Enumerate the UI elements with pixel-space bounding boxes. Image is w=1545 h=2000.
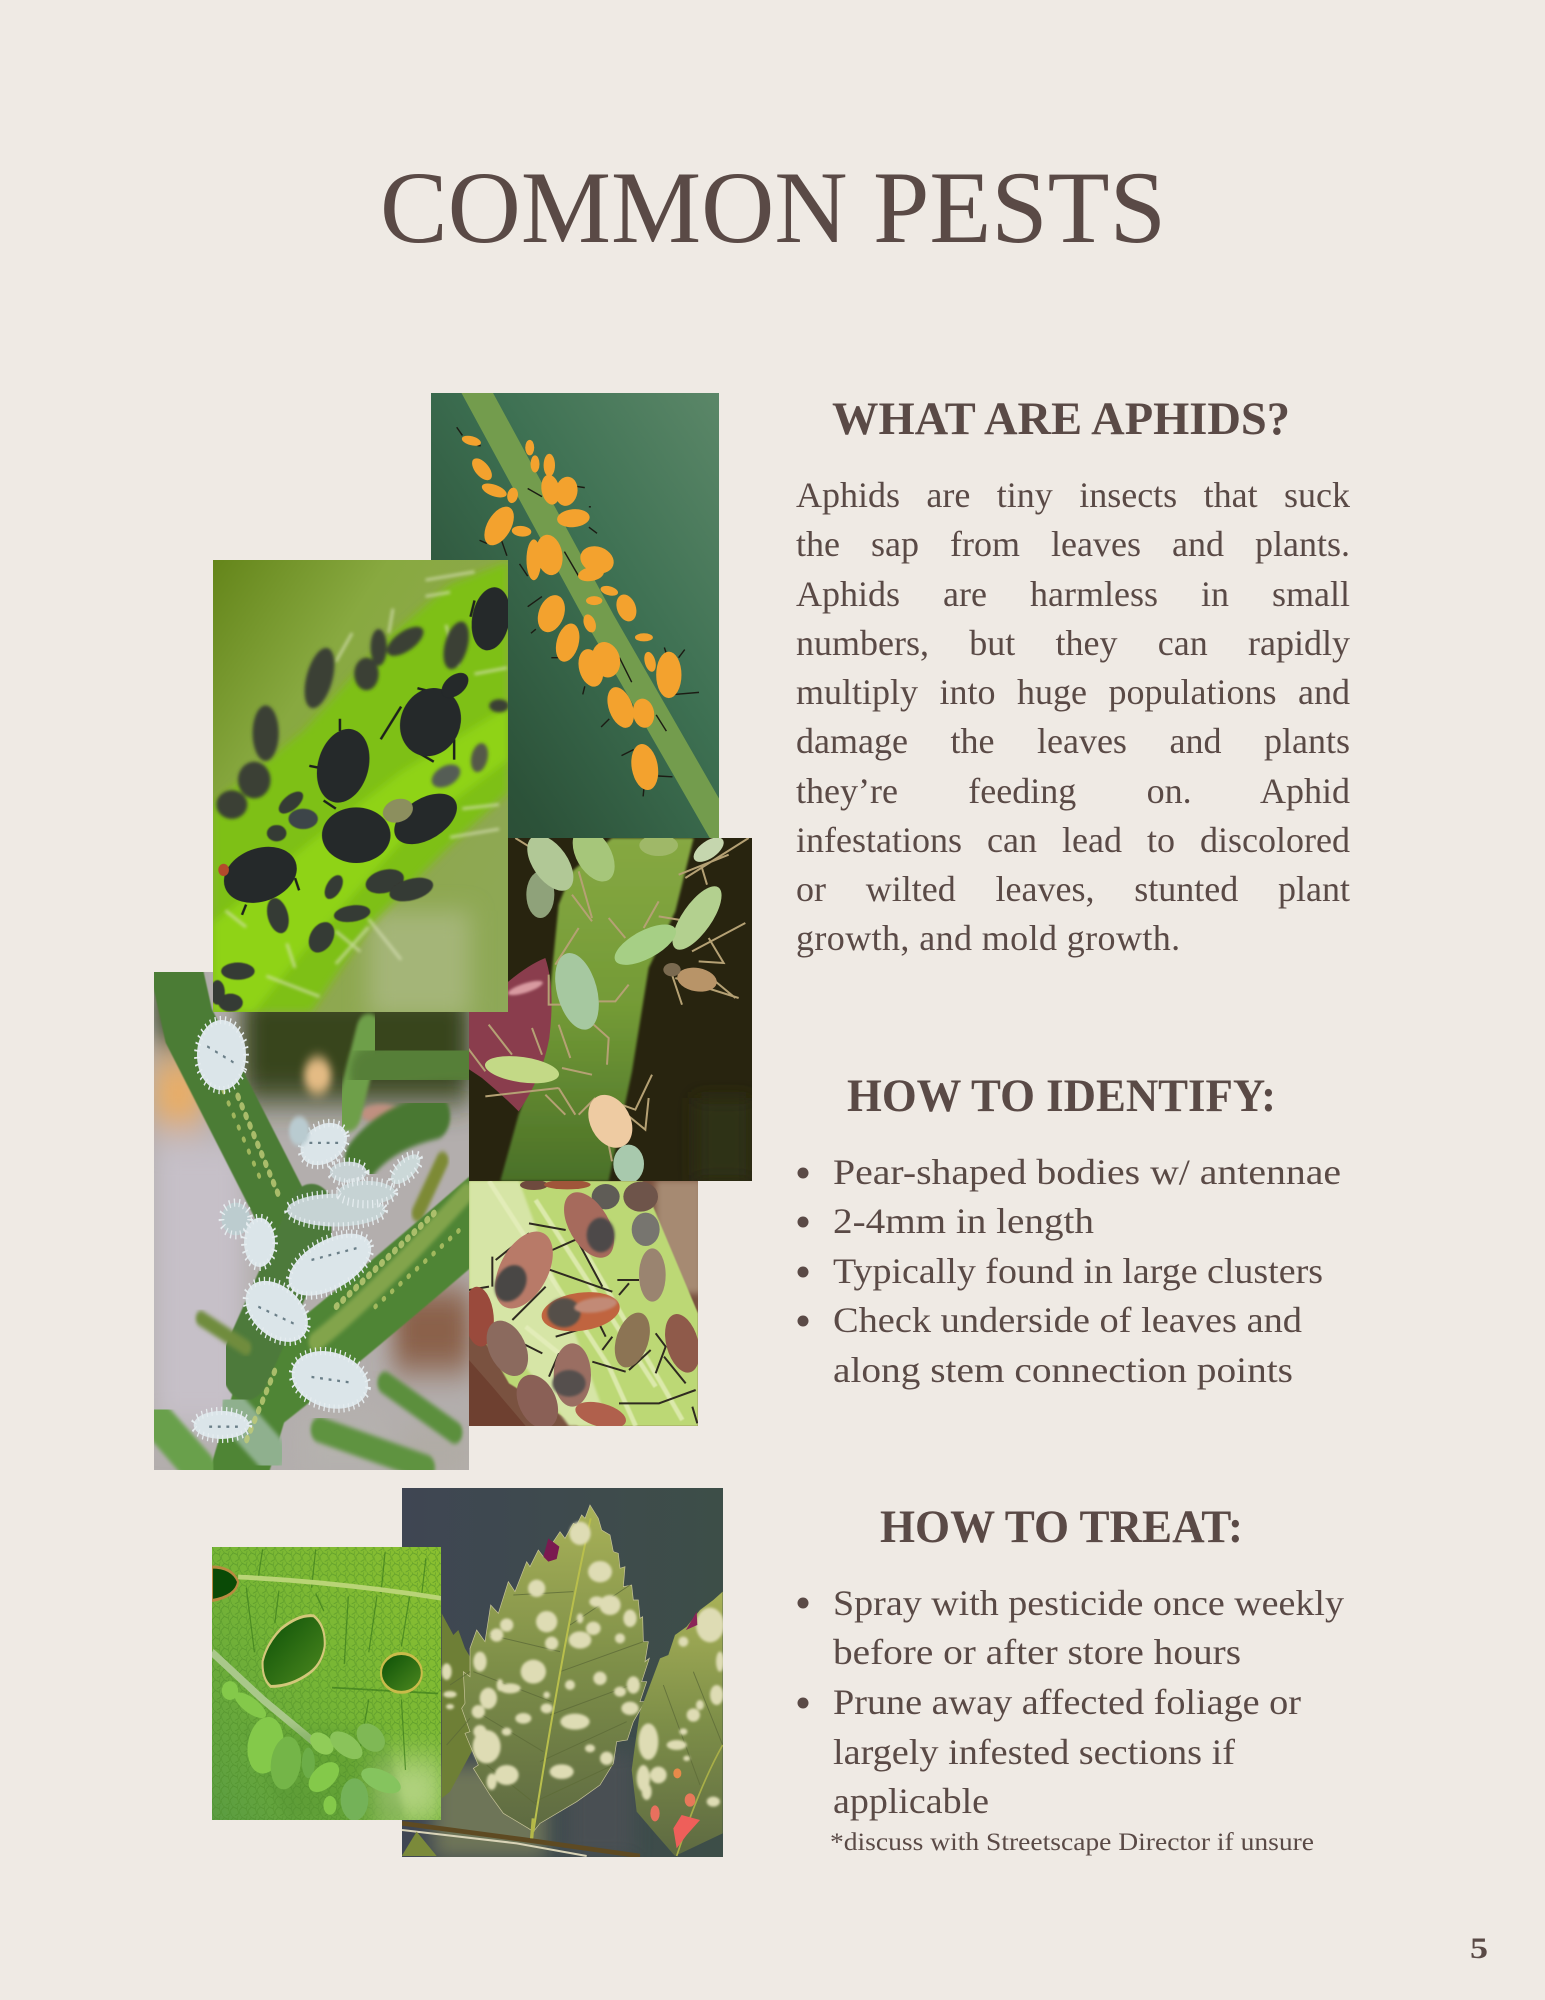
photo: woolly white pests on green stems xyxy=(154,972,469,1470)
list: how to treat bullets: Prune away affected foliage or xyxy=(833,1682,1301,1722)
heading: how to identify: HOW TO IDENTIFY: xyxy=(847,1070,1276,1122)
page number: 5 xyxy=(1470,1932,1488,1965)
list: how to identify bullets: Typically found in large clusters xyxy=(833,1251,1323,1291)
list: how to treat bullets: before or after store hours xyxy=(833,1632,1241,1672)
list: how to identify bullets: 2-4mm in length xyxy=(833,1201,1094,1241)
photo: black aphids on bright green leaf xyxy=(213,560,508,1012)
photo: green aphids on leaf with holes xyxy=(212,1547,441,1820)
paragraph: aphids description: Aphids are harmless in small xyxy=(796,574,1350,614)
paragraph: aphids description xyxy=(796,475,1350,958)
photo: pale green aphids on stem xyxy=(469,838,752,1181)
list: how to identify bullets: Check underside of leaves and xyxy=(833,1300,1302,1340)
list: how to treat bullets xyxy=(798,1583,1344,1821)
list: how to identify bullets: along stem connection points xyxy=(833,1350,1293,1390)
list: how to identify bullets: Pear-shaped bodies w/ antennae xyxy=(833,1152,1341,1192)
footnote: *discuss with Streetscape Director if unsure xyxy=(830,1829,1314,1856)
photo: rose leaves with white stippling xyxy=(402,1488,723,1857)
paragraph: aphids description: or wilted leaves, stunted plant xyxy=(796,869,1350,909)
list: how to treat bullets: applicable xyxy=(833,1781,989,1821)
photo: orange aphids on green stem xyxy=(431,393,719,838)
paragraph: aphids description: multiply into huge populations and xyxy=(796,672,1350,712)
list: how to treat bullets: largely infested sections if xyxy=(833,1732,1235,1772)
paragraph: aphids description: growth, and mold growth. xyxy=(796,918,1181,958)
paragraph: aphids description: Aphids are tiny insects that suck xyxy=(796,475,1350,515)
heading: what are aphids: WHAT ARE APHIDS? xyxy=(832,393,1290,445)
paragraph: aphids description: the sap from leaves and plants. xyxy=(796,524,1350,564)
title: COMMON PESTS xyxy=(380,151,1166,265)
paragraph: aphids description: damage the leaves and plants xyxy=(796,721,1350,761)
heading: how to treat: HOW TO TREAT: xyxy=(880,1501,1243,1553)
paragraph: aphids description: they’re feeding on. Aphid xyxy=(796,771,1350,811)
list: how to identify bullets xyxy=(798,1152,1341,1390)
photo: brown aphids on pale leaf xyxy=(469,1181,698,1426)
list: how to treat bullets: Spray with pesticide once weekly xyxy=(833,1583,1344,1623)
paragraph: aphids description: numbers, but they can rapidly xyxy=(796,623,1350,663)
paragraph: aphids description: infestations can lead to discolored xyxy=(796,820,1350,860)
